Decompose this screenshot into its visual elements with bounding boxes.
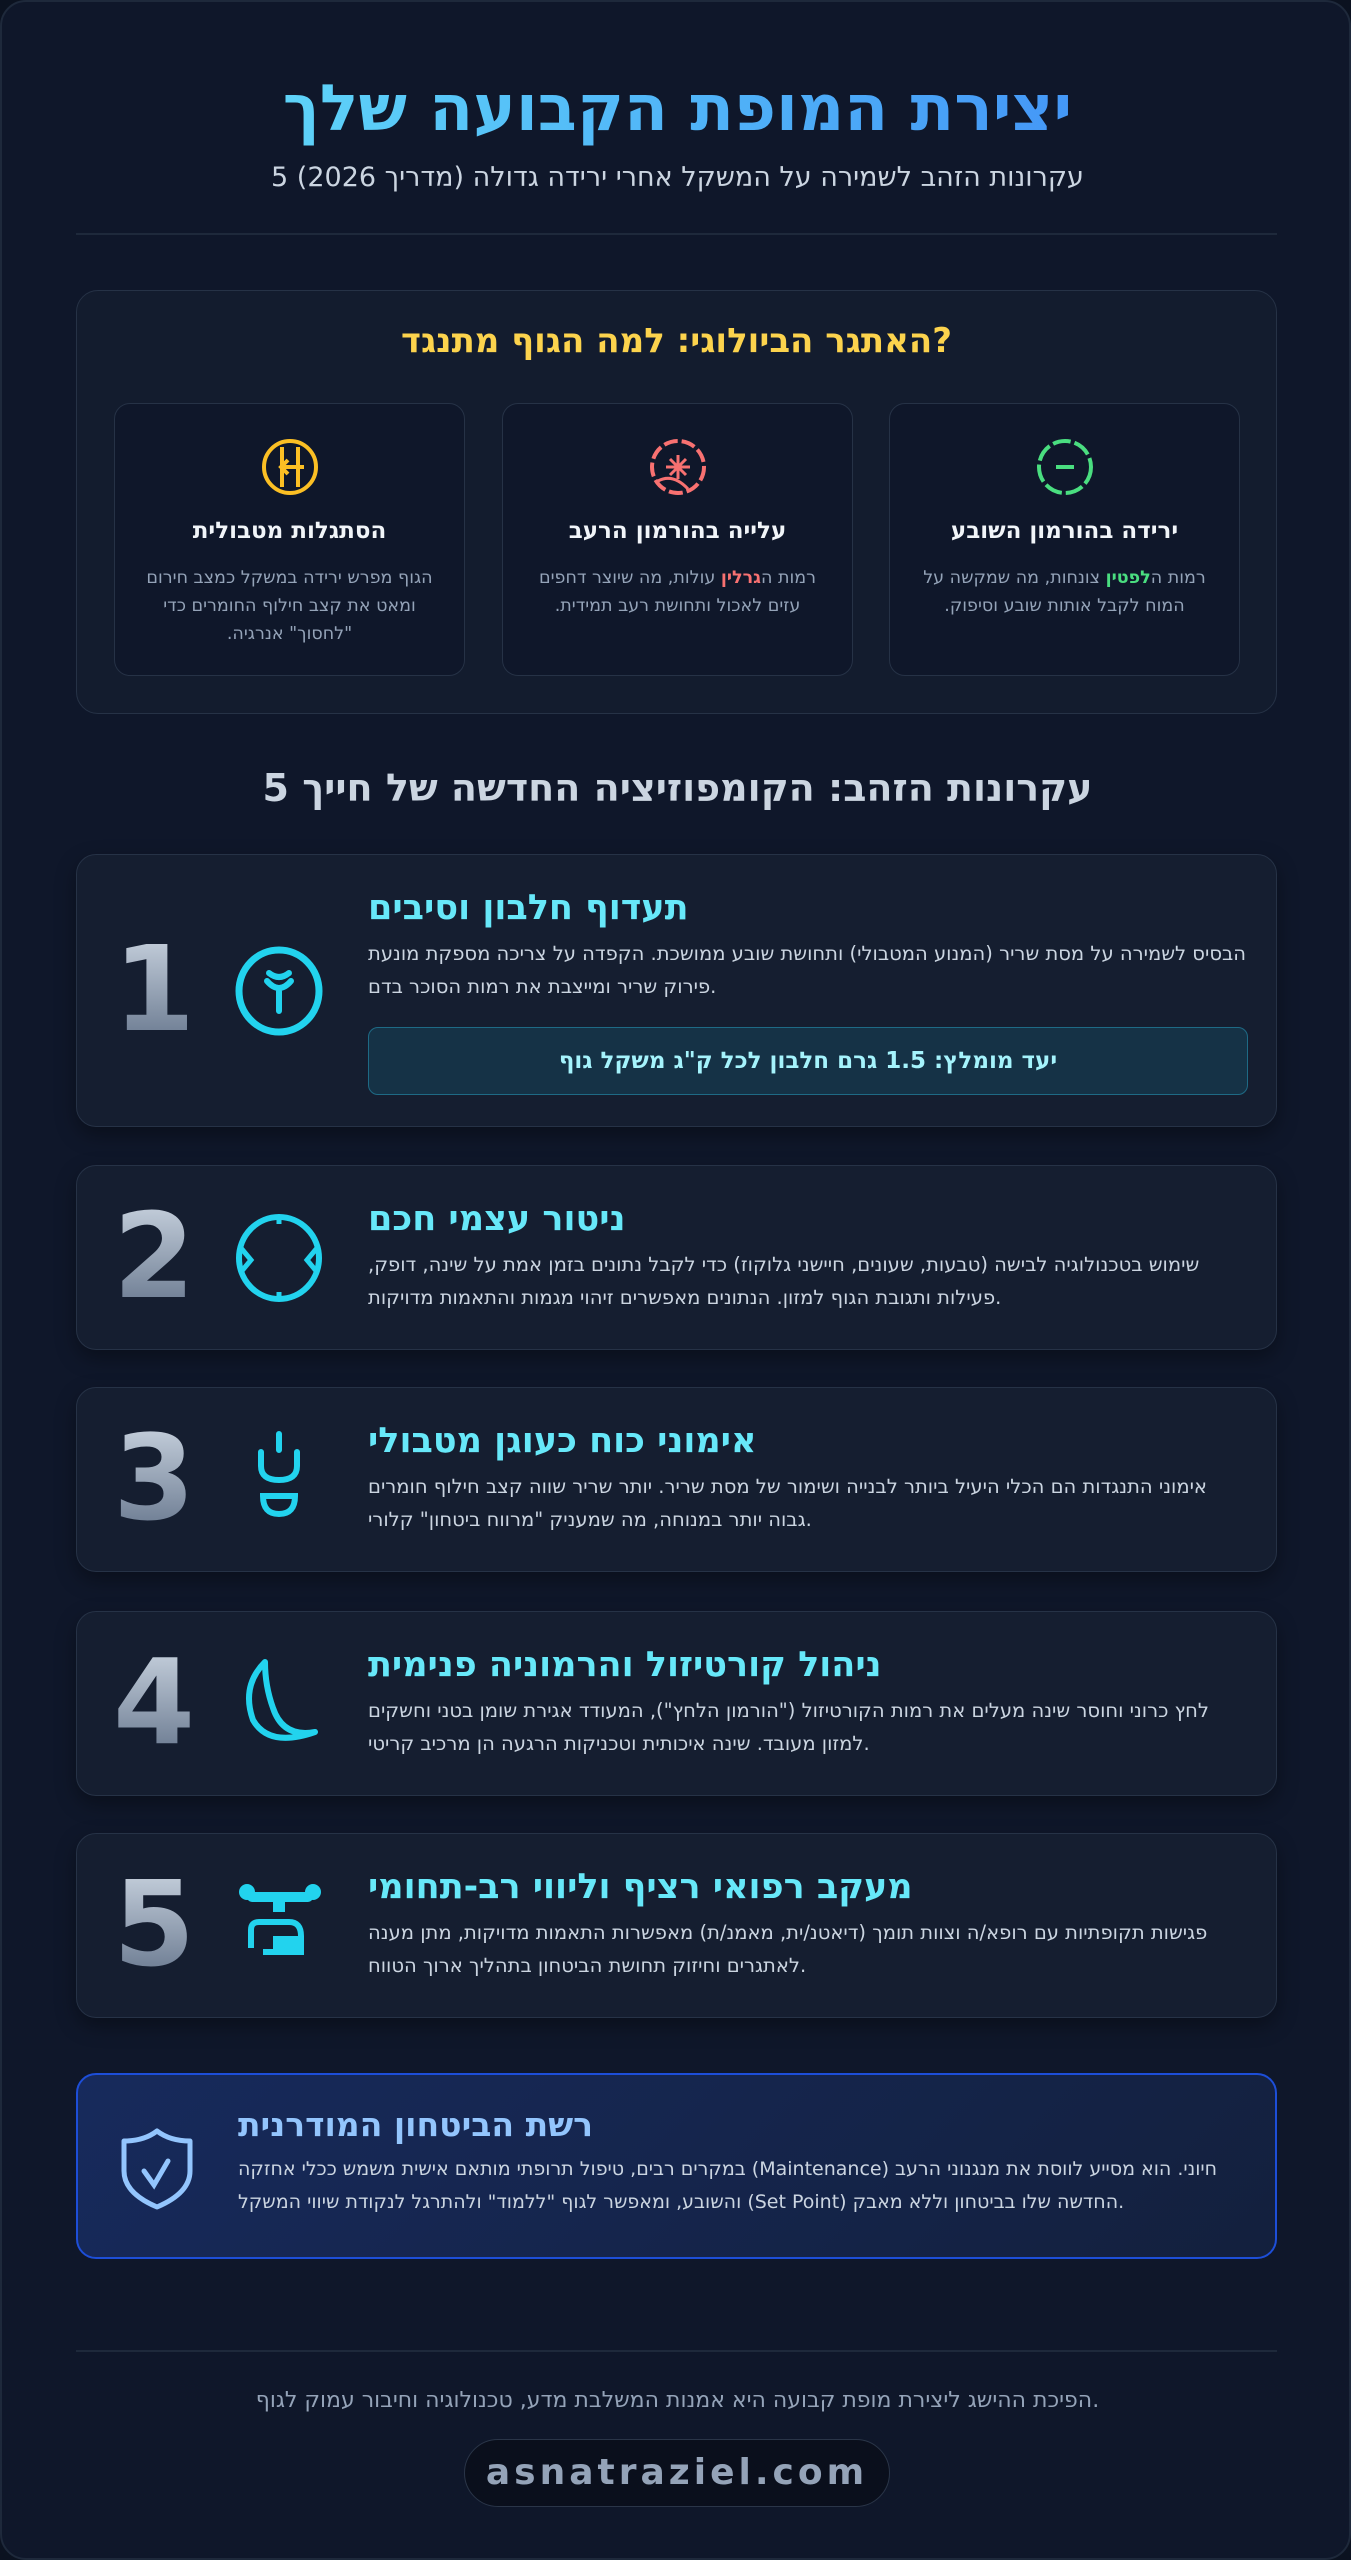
card title: ירידה בהורמון השובע <box>951 518 1178 544</box>
footer pill: website <box>464 2439 890 2507</box>
icon: shield <box>122 2128 192 2210</box>
icon: kettlebell <box>258 1431 300 1517</box>
text block: פגישות תקופתיות עם רופא/ה וצוות תומך (דיאטנ/ית, מאמנ/ת) מאפשרות התאמות מדויקות, מתן מענה לאתגרים וחיזוק תחושת הביטחון בתהליך ארוך הטווח. <box>368 1921 1207 1977</box>
icon: metabolic <box>262 439 318 495</box>
number 3: 3 <box>113 1409 195 1547</box>
icon: medical team <box>239 1884 321 1955</box>
number 4: 4 <box>113 1633 195 1771</box>
icon: moon <box>246 1659 318 1741</box>
panel: biological challenge <box>76 290 1277 714</box>
icon: monitoring <box>236 1214 322 1302</box>
safety text block <box>238 2105 1217 2213</box>
text block <box>368 1645 1209 1755</box>
text block: מעקב רפואי רציף וליווי רב-תחומי <box>368 1867 913 1907</box>
text block <box>368 1421 1207 1531</box>
text block <box>368 1199 1199 1309</box>
callout: target: יעד מומלץ: 1.5 גרם חלבון לכל ק"ג משקל גוף <box>559 1048 1057 1074</box>
text block: לחץ כרוני וחוסר שינה מעלים את רמות הקורטיזול ("הורמון הלחץ"), המעודד אגירת שומן בטני וחשקים למזון מעובד. שינה איכותית וטכניקות הרגעה הן מרכיב קריטי. <box>368 1699 1209 1755</box>
safety text block: במקרים רבים, טיפול תרופתי מותאם אישית משמש ככלי אחזקה (Maintenance) חיוני. הוא מסייע לווסת את מנגנוני הרעב והשובע, ומאפשר לגוף "ללמוד" ולהתרגל לנקודת שיווי המשקל (Set Point) החדשה שלו בביטחון וללא מאבק. <box>238 2158 1217 2213</box>
icon: ghrelin <box>650 439 706 495</box>
card 5: medical follow-up <box>76 1833 1277 2018</box>
footer text: הפיכת ההישג ליצירת מופת קבועה היא אמנות המשלבת מדע, טכנולוגיה וחיבור עמוק לגוף. <box>256 2388 1099 2413</box>
section heading: 5 עקרונות הזהב: הקומפוזיציה החדשה של חייך <box>263 766 1092 810</box>
callout: target <box>368 1027 1248 1095</box>
text block <box>368 888 1248 1095</box>
text block <box>368 1867 1207 1977</box>
text block: תעדוף חלבון וסיבים <box>368 888 689 928</box>
number 2: 2 <box>113 1187 195 1325</box>
text block: אימוני התנגדות הם הכלי היעיל ביותר לבנייה ושימור של מסת שריר. יותר שריר שווה קצב חילוף חומרים גבוה יותר במנוחה, מה שמעניק "מרווח ביטחון" קלורי. <box>368 1475 1207 1531</box>
subtitle: 5 עקרונות הזהב לשמירה על המשקל אחרי ירידה גדולה (מדריך 2026) <box>271 162 1084 193</box>
text block: שימוש בטכנולוגיה לבישה (טבעות, שעונים, חיישני גלוקוז) כדי לקבל נתונים בזמן אמת על שינה, דופק, פעילות ותגובת הגוף למזון. הנתונים מאפשרים זיהוי מגמות והתאמות מדויקות. <box>368 1253 1199 1309</box>
text block: ניהול קורטיזול והרמוניה פנימית <box>368 1645 882 1685</box>
card 1: protein <box>76 854 1277 1127</box>
card: hunger hormone <box>502 403 853 676</box>
title: יצירת המופת הקבועה שלך <box>283 72 1072 146</box>
icon: protein <box>236 946 322 1036</box>
text block: אימוני כוח כעוגן מטבולי <box>368 1421 756 1461</box>
card title: עלייה בהורמון הרעב <box>569 518 786 544</box>
number 1: 1 <box>113 920 195 1058</box>
card 3: strength training <box>76 1387 1277 1572</box>
panel: modern safety net <box>76 2073 1277 2259</box>
card text: הגוף מפרש ירידה במשקל כמצב חירום ומאט את קצב חילוף החומרים כדי "לחסוך" אנרגיה. <box>146 568 433 644</box>
number 5: 5 <box>113 1855 195 1993</box>
safety text block: רשת הביטחון המודרנית <box>238 2105 593 2144</box>
text block: ניטור עצמי חכם <box>368 1199 625 1239</box>
title <box>2 64 1351 154</box>
card: satiety hormone <box>889 403 1240 676</box>
card: metabolic adaptation <box>114 403 465 676</box>
footer pill: website: asnatraziel.com <box>486 2452 868 2493</box>
card 4: cortisol <box>76 1611 1277 1796</box>
panel heading: האתגר הביולוגי: למה הגוף מתנגד? <box>401 321 952 361</box>
icon: leptin <box>1037 439 1093 495</box>
card text: רמות הגרלין עולות, מה שיוצר דחפים עזים לאכול ותחושת רעב תמידית. <box>539 568 816 616</box>
card text: רמות הלפטין צונחות, מה שמקשה על המוח לקבל אותות שובע וסיפוק. <box>923 568 1206 616</box>
card 2: monitoring <box>76 1165 1277 1350</box>
text block: הבסיס לשמירה על מסת שריר (המנוע המטבולי) ותחושת שובע ממושכת. הקפדה על צריכה מספקת מונעת פירוק שריר ומייצבת את רמות הסוכר בדם. <box>368 942 1246 998</box>
card title: הסתגלות מטבולית <box>193 518 386 544</box>
